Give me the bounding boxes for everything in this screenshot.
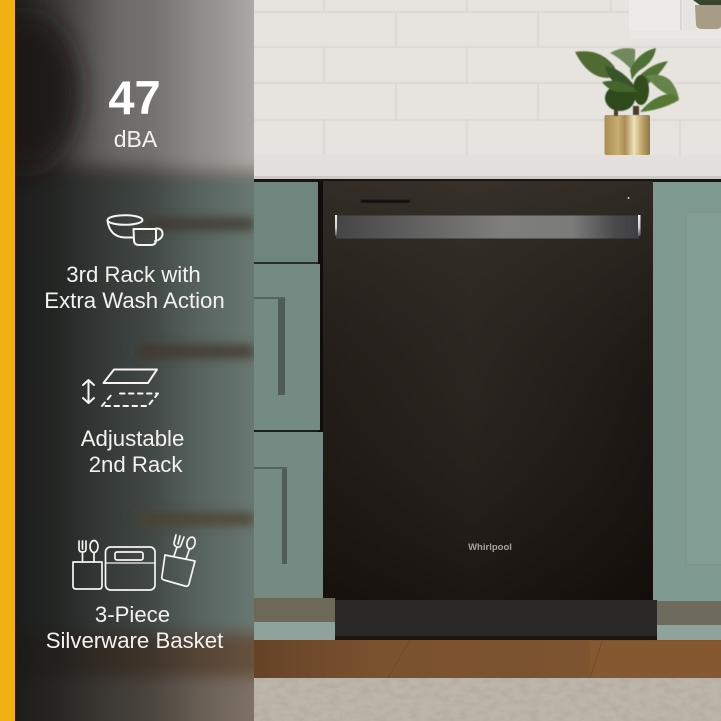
feature label: 3rd rack bbox=[44, 262, 225, 313]
stat number: 47 bbox=[108, 71, 161, 124]
wall tiles bbox=[0, 0, 721, 156]
toe kick and base bbox=[254, 598, 721, 645]
gold pot plant bbox=[575, 48, 679, 155]
center tray bbox=[106, 547, 155, 590]
small potted plant top right bbox=[693, 0, 721, 29]
drawer edges beside door bbox=[318, 264, 323, 598]
stat unit: dBA bbox=[114, 126, 157, 152]
dishwasher handle bbox=[335, 215, 640, 238]
right basket bbox=[162, 535, 196, 586]
icon: silverware baskets bbox=[72, 534, 196, 591]
frosted side panel bbox=[15, 0, 254, 721]
countertop bbox=[254, 155, 721, 182]
rug bbox=[200, 678, 721, 721]
icon: adjustable rack bbox=[82, 368, 159, 407]
dishwasher door bbox=[318, 181, 653, 600]
feature label: silverware basket bbox=[46, 602, 224, 653]
yellow accent bar bbox=[0, 0, 15, 721]
feature label: 3rd rack: 3rd Rack with bbox=[66, 262, 201, 287]
left basket bbox=[73, 540, 102, 589]
icon: bowl and cup bbox=[106, 214, 164, 246]
feature label: silverware basket: Silverware Basket bbox=[46, 628, 223, 653]
feature label: 3rd rack: Extra Wash Action bbox=[44, 288, 225, 313]
wood floor bbox=[200, 640, 721, 678]
feature label: adjustable 2nd rack bbox=[80, 426, 184, 477]
feature label: silverware basket: 3-Piece bbox=[95, 602, 170, 627]
feature label: adjustable 2nd rack: 2nd Rack bbox=[89, 452, 182, 477]
left cabinets bbox=[200, 182, 323, 598]
stat: 47 dBA bbox=[108, 71, 161, 152]
feature label: adjustable 2nd rack: Adjustable bbox=[81, 426, 184, 451]
brand logo: Whirlpool bbox=[468, 542, 512, 553]
right cabinet bbox=[653, 182, 721, 601]
